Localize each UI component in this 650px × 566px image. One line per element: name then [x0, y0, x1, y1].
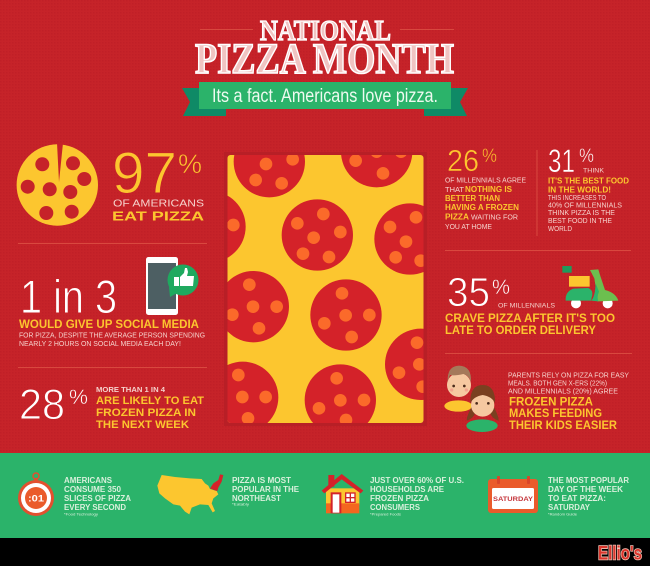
text: most popular day: SATURDAY — [548, 503, 591, 512]
stat: 1 in 3: FOR PIZZA, DESPITE THE AVERAGE PERSON SPENDING — [19, 332, 205, 340]
text: parents rely on pizza — [508, 372, 629, 432]
text: most popular day: DAY OF THE WEEK — [548, 485, 623, 494]
text: parents rely on pizza: AND MILLENNIALS (20%) AGREE — [508, 388, 618, 396]
stat: 97% of Americans eat pizza: EAT PIZZA — [112, 208, 205, 224]
text: 350 slices: CONSUME 350 — [64, 485, 122, 494]
text: northeast — [232, 476, 300, 506]
stat: 35% crave pizza: OF MILLENNIALS — [498, 304, 555, 310]
stat: 1 in 3: 1 in 3 — [20, 270, 117, 323]
ribbon banner: Its a fact. Americans love pizza. — [212, 86, 438, 107]
icon: delivery scooter — [562, 266, 618, 308]
stat: 35% crave pizza — [445, 269, 615, 337]
stat: 31% best food: 31 — [548, 143, 575, 179]
icon: Saturday calendar: SATURDAY — [493, 496, 534, 503]
icon: parent and child faces — [444, 366, 499, 432]
text: parents rely on pizza: MEALS. BOTH GEN X-ERS (22%) — [508, 380, 607, 388]
icon: Saturday calendar — [488, 476, 538, 513]
stat: 31% best food: 40% OF MILLENNIALS — [548, 202, 622, 210]
stat: 26% of millennials: WAITING FOR — [471, 214, 518, 222]
text: northeast: NORTHEAST — [232, 494, 281, 503]
text: parents rely on pizza: FROZEN PIZZA — [509, 396, 593, 408]
stat: 28% frozen pizza: 28 — [19, 381, 65, 429]
text: households — [370, 476, 464, 516]
stat: 97% of Americans eat pizza: % — [178, 149, 202, 179]
stat: 26% of millennials: OF MILLENNIALS AGREE — [445, 178, 526, 184]
stat: 26% of millennials: YOU AT HOME — [445, 224, 492, 231]
stat: 31% best food: WORLD — [548, 226, 572, 233]
stat: 26% of millennials: NOTHING IS — [465, 185, 513, 194]
text: 350 slices — [64, 476, 131, 516]
text: 350 slices: SLICES OF PIZZA — [64, 494, 131, 503]
icon: pizza with slice — [17, 143, 98, 226]
stat: 1 in 3: WOULD GIVE UP SOCIAL MEDIA — [19, 319, 199, 331]
stat: 31% best food: THINK — [583, 168, 604, 174]
stat: 26% of millennials: THAT — [445, 187, 465, 194]
text: northeast: PIZZA IS MOST — [232, 476, 291, 485]
stat: 31% best food — [548, 143, 629, 233]
stat: 35% crave pizza: 35 — [447, 269, 490, 315]
stat: 31% best food: % — [579, 146, 594, 167]
black strip — [0, 538, 650, 566]
stat: 97% of Americans eat pizza: 97 — [112, 141, 177, 206]
icon: house — [322, 474, 363, 513]
stat: 28% frozen pizza: ARE LIKELY TO EAT — [96, 395, 204, 407]
text: households: HOUSEHOLDS ARE — [370, 485, 445, 494]
stat: 1 in 3 — [19, 270, 205, 348]
title: PIZZA MONTH — [195, 36, 454, 83]
text: households: JUST OVER 60% OF U.S. — [370, 476, 464, 485]
stat: 31% best food: IT'S THE BEST FOOD — [548, 176, 629, 186]
stat: 35% crave pizza: LATE TO ORDER DELIVERY — [445, 325, 596, 337]
text: parents rely on pizza: PARENTS RELY ON PIZZA FOR EASY — [508, 372, 629, 380]
stat: 26% of millennials: BETTER THAN — [445, 194, 500, 203]
text: northeast: POPULAR IN THE — [232, 485, 300, 494]
text: most popular day: TO EAT PIZZA: — [548, 494, 606, 503]
icon: stopwatch — [18, 473, 54, 516]
stat: 28% frozen pizza: MORE THAN 1 IN 4 — [96, 387, 165, 394]
title — [195, 16, 454, 83]
stat: 28% frozen pizza: % — [69, 386, 88, 409]
ribbon banner — [182, 82, 468, 116]
stat: 31% best food: BEST FOOD IN THE — [548, 218, 612, 225]
text: most popular day — [548, 476, 629, 516]
stat: 28% frozen pizza: THE NEXT WEEK — [96, 419, 189, 431]
stat: 26% of millennials: % — [482, 146, 497, 167]
text: most popular day: THE MOST POPULAR — [548, 476, 629, 485]
text: households: CONSUMERS — [370, 503, 421, 512]
text: households: FROZEN PIZZA — [370, 494, 429, 503]
panel: central pizza pattern — [224, 152, 427, 426]
panel: green footer band — [0, 453, 650, 538]
stat: 35% crave pizza: % — [492, 276, 510, 299]
stat: 26% of millennials: PIZZA — [445, 212, 469, 222]
title: NATIONAL — [260, 16, 391, 47]
text: parents rely on pizza: MAKES FEEDING — [509, 408, 602, 420]
stat: 28% frozen pizza — [19, 381, 204, 431]
icon: stopwatch: :01 — [28, 494, 45, 504]
stat: 35% crave pizza: CRAVE PIZZA AFTER IT'S TOO — [445, 313, 615, 325]
stat: 26% of millennials — [445, 143, 526, 231]
stat: 97% of Americans eat pizza — [112, 141, 205, 224]
text: 350 slices: AMERICANS — [64, 476, 113, 485]
stat: 28% frozen pizza: FROZEN PIZZA IN — [96, 407, 196, 419]
icon: US map — [157, 474, 223, 514]
stat: 26% of millennials: HAVING A FROZEN — [445, 203, 519, 212]
stat: 97% of Americans eat pizza: OF AMERICANS — [113, 198, 204, 210]
text: parents rely on pizza: THEIR KIDS EASIER — [509, 420, 618, 432]
text: most popular day: *Random Guide — [548, 512, 577, 516]
text: households: *Prepared Foods — [370, 512, 402, 516]
stat: 31% best food: THIS INCREASES TO — [548, 195, 606, 202]
text: 350 slices: EVERY SECOND — [64, 503, 126, 512]
text: 350 slices: *Food Technology — [64, 512, 99, 516]
icon: phone with thumbs up — [146, 257, 198, 315]
stat: 26% of millennials: 26 — [447, 143, 479, 178]
stat: 31% best food: THINK PIZZA IS THE — [548, 210, 615, 217]
stat: 31% best food: IN THE WORLD! — [548, 186, 611, 194]
stat: 1 in 3: NEARLY 2 HOURS ON SOCIAL MEDIA EACH DAY! — [19, 341, 181, 348]
text: northeast: *Eatably — [232, 502, 250, 506]
